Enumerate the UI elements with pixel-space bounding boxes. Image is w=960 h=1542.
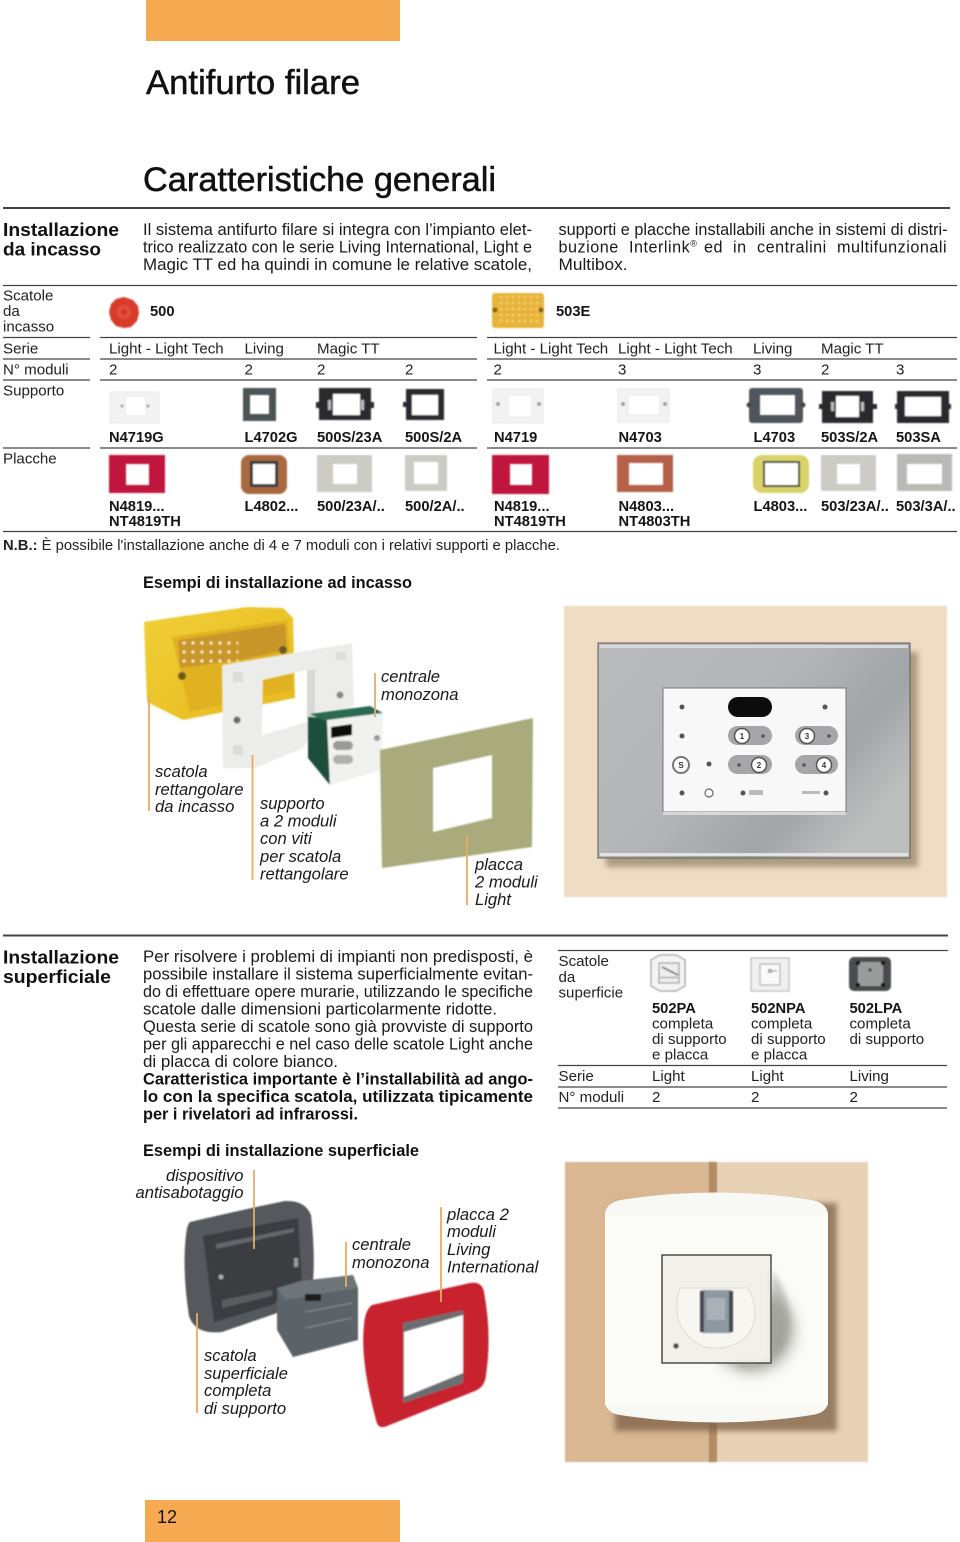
heading: Installazione da incasso (3, 219, 119, 260)
heading: Installazione da incasso: Installazione (3, 219, 119, 240)
table: scatole da incasso (3, 286, 957, 532)
body text surface installation: Caratteristica importante è l’installabilità ad ango- (143, 1070, 533, 1088)
label: placca 2 moduli Living International: Living (447, 1240, 491, 1259)
column: 502NPA: di supporto (751, 1031, 826, 1048)
control unit module (308, 706, 383, 785)
modules row: 3 (618, 362, 626, 378)
intro text left column: Il sistema antifurto filare si integra con l’impianto elet- (143, 221, 532, 239)
body text surface installation: do di effettuare opere murarie, utilizzando le specifiche (143, 983, 533, 1001)
heading: Installazione superficiale (3, 946, 119, 987)
modules row (109, 362, 904, 378)
row labels: Placche (3, 450, 57, 468)
intro text right column: Multibox. (558, 256, 628, 274)
intro text right column: buzione (558, 238, 619, 256)
column: 502NPA (751, 1001, 826, 1106)
modules row: 2 (821, 362, 829, 378)
note N.B.: N.B.: È possibile l'installazione anche di 4 e 7 moduli con i relativi supporti e placche. (3, 537, 560, 554)
column: 502PA: di supporto (652, 1031, 727, 1048)
modules row: 2 (244, 362, 253, 378)
column: 502PA (652, 1001, 727, 1106)
column: 502PA: Light (652, 1068, 686, 1085)
modules row: 3 (753, 362, 761, 378)
column: 502NPA: 502NPA (751, 1001, 806, 1017)
white support frame (222, 643, 354, 768)
series row left: Magic TT (317, 340, 380, 358)
exploded diagram: flush installation (144, 607, 539, 909)
icon: 502NPA box (751, 958, 789, 991)
column: 502NPA: completa (751, 1016, 813, 1032)
label: dispositivo antisabotaggio: dispositivo (166, 1166, 244, 1185)
label: placca 2 moduli Living International: International (447, 1258, 540, 1276)
modules row: 3 (896, 362, 904, 378)
row labels (3, 288, 69, 468)
column: 502NPA: 2 (751, 1089, 759, 1106)
body text surface installation (143, 948, 533, 1124)
supports codes: N4719G (109, 430, 164, 446)
series row left (109, 340, 380, 358)
label: scatola superficiale completa di supporto: scatola (204, 1346, 257, 1365)
series row right (494, 340, 884, 358)
heading: Esempi di installazione superficiale: Esempi di installazione superficiale (143, 1141, 419, 1160)
row labels (558, 953, 624, 1106)
label: supporto a 2 moduli: rettangolare (260, 864, 349, 884)
label: placca 2 moduli Light: 2 moduli (474, 872, 539, 892)
modules row: 2 (109, 362, 117, 378)
cover plates codes: NT4803TH (618, 514, 690, 530)
cover plates row images (109, 454, 952, 494)
row labels: da (3, 303, 20, 320)
label: dispositivo antisabotaggio: antisabotaggio (136, 1183, 244, 1202)
top orange tab (146, 0, 400, 41)
cover plates codes (109, 499, 956, 530)
supports codes: 500S/23A (317, 430, 383, 446)
column: 502PA: 502PA (652, 1001, 696, 1017)
modules row: 2 (494, 362, 502, 378)
body text surface installation: lo con la specifica scatola, utilizzata tipicamente (143, 1088, 533, 1106)
cover plates codes: NT4819TH (494, 514, 566, 530)
heading: Installazione da incasso: da incasso (3, 238, 101, 260)
column: 502LPA: 2 (850, 1089, 858, 1106)
series row right: Light - Light Tech (618, 340, 733, 358)
cover plates codes: 503/23A/.. (821, 499, 889, 515)
series row right: Light - Light Tech (494, 340, 608, 358)
row labels: da (558, 969, 576, 986)
row labels: Serie (558, 1068, 594, 1085)
cover plates codes: N4803... (618, 499, 674, 515)
row labels: N° moduli (3, 362, 69, 378)
cover plates codes: L4803... (754, 499, 807, 515)
intro text right column: centralini (757, 238, 827, 256)
series row right: Living (753, 340, 792, 358)
label: supporto a 2 moduli: a 2 moduli (260, 812, 338, 830)
intro text right column: ® (690, 238, 697, 248)
column: 502LPA: di supporto (850, 1031, 924, 1048)
panel display and buttons: 2 (757, 761, 762, 770)
label: scatola superficiale completa di supporto (197, 1313, 288, 1418)
column: 502PA: completa (652, 1016, 714, 1032)
cover plates codes: 500/2A/.. (405, 499, 465, 515)
label: centrale monozona: monozona (381, 685, 458, 704)
label: supporto a 2 moduli: per scatola (259, 847, 341, 866)
label: dispositivo antisabotaggio (136, 1166, 254, 1249)
cover plates codes: NT4819TH (109, 514, 181, 530)
row labels: Supporto (3, 382, 64, 400)
label: scatola rettangolare da incasso: scatola (155, 762, 208, 781)
label: supporto a 2 moduli: supporto (260, 794, 325, 813)
icon: yellow box 503E (492, 293, 544, 328)
row labels: incasso (3, 318, 54, 336)
olive cover plate (380, 718, 533, 868)
label: centrale monozona (375, 667, 458, 717)
grey control module (277, 1275, 358, 1357)
intro text left column: trico realizzato con le serie Living International, Light e (143, 238, 532, 256)
series row left: Light - Light Tech (109, 340, 224, 358)
label: placca 2 moduli Light: Light (475, 890, 512, 909)
label: supporto a 2 moduli (252, 755, 349, 884)
supports codes: L4702G (244, 430, 298, 446)
label: 503E: 503E (556, 304, 591, 320)
supports codes: 503SA (896, 430, 941, 446)
panel display and buttons (673, 697, 838, 797)
supports codes: L4703 (754, 430, 795, 446)
label: supporto a 2 moduli: con viti (260, 829, 313, 848)
heading: Installazione superficiale: Installazione (3, 946, 119, 968)
body text surface installation: per gli apparecchi e nel caso delle scatole Light anche (143, 1036, 533, 1054)
body text surface installation: per i rivelatori ad infrarossi. (143, 1106, 358, 1124)
cover plates codes: N4819... (109, 499, 165, 515)
column: 502NPA: e placca (751, 1046, 808, 1064)
label: placca 2 moduli Living International: moduli (447, 1222, 497, 1241)
label: scatola rettangolare da incasso: da incasso (155, 797, 234, 816)
label: centrale monozona: centrale (352, 1235, 411, 1254)
column: 502LPA: 502LPA (850, 1001, 903, 1017)
body text surface installation: Questa serie di scatole sono già provviste di supporto (143, 1018, 533, 1036)
row labels: superficie (558, 984, 623, 1002)
intro text left column (143, 221, 532, 274)
label: centrale monozona: centrale (381, 667, 440, 686)
cover plates codes: 500/23A/.. (317, 499, 385, 515)
cover plates codes: 503/3A/.. (896, 499, 956, 515)
column: 502LPA: completa (850, 1016, 911, 1032)
label: placca 2 moduli Light: placca (474, 855, 523, 874)
icon: 502PA box (651, 955, 685, 991)
intro text right column: Interlink (629, 238, 691, 256)
label: scatola superficiale completa di supporto: completa (204, 1381, 271, 1400)
row labels: N° moduli (558, 1089, 624, 1106)
heading: Esempi di installazione ad incasso: Esempi di installazione ad incasso (143, 573, 412, 592)
intro text right column: ed (704, 238, 723, 256)
row labels: Scatole (558, 953, 609, 970)
label: centrale monozona (346, 1235, 430, 1287)
intro text right column (558, 221, 948, 274)
intro text right column: in (733, 238, 747, 256)
page title: Antifurto filare (146, 64, 360, 102)
supports row images (110, 388, 951, 423)
column: 502PA: 2 (652, 1089, 660, 1106)
supports codes (109, 430, 941, 446)
row labels: Serie (3, 340, 38, 358)
label: centrale monozona: monozona (352, 1253, 430, 1272)
intro text left column: Magic TT ed ha quindi in comune le relative scatole, (143, 256, 532, 274)
panel display and buttons: 4 (822, 761, 827, 770)
cover plates codes: L4802... (244, 499, 298, 515)
column: 502LPA (850, 1001, 924, 1106)
column: 502LPA: Living (850, 1068, 889, 1085)
cover plates codes: N4819... (494, 499, 550, 515)
label: scatola superficiale completa di supporto: di supporto (204, 1399, 286, 1418)
column: 502PA: e placca (652, 1046, 709, 1064)
label: placca 2 moduli Living International (441, 1205, 540, 1302)
detector lens (674, 1290, 733, 1348)
panel display and buttons: 1 (740, 732, 745, 741)
panel display and buttons: S (678, 761, 684, 770)
photo: surface-mounted infrared detector (565, 1162, 868, 1462)
series row left: Living (244, 340, 284, 358)
section heading: Caratteristiche generali: Caratteristiche generali (143, 161, 496, 199)
red cover plate (363, 1283, 489, 1427)
intro text right column: supporti e placche installabili anche in sistemi di distri- (558, 221, 948, 239)
exploded diagram: surface installation (136, 1166, 540, 1427)
label: scatola rettangolare da incasso: rettangolare (155, 780, 244, 799)
label: scatola superficiale completa di supporto: superficiale (204, 1364, 288, 1383)
table: scatole da superficie (558, 950, 948, 1108)
body text surface installation: scatole dalle dimensioni particolarmente ridotte. (143, 1000, 497, 1018)
label: scatola rettangolare da incasso (149, 695, 244, 816)
supports codes: 503S/2A (821, 430, 879, 446)
row labels: Scatole (3, 288, 53, 304)
modules row: 2 (317, 362, 325, 378)
bottom orange tab (145, 1500, 400, 1542)
series row right: Magic TT (821, 340, 884, 358)
photo: flush-mounted alarm panel (564, 606, 947, 897)
page number: 12 (157, 1507, 177, 1527)
intro text right column: multifunzionali (837, 238, 947, 256)
body text surface installation: possibile installare il sistema superficialmente evitan- (143, 966, 533, 984)
body text surface installation: Per risolvere i problemi di impianti non predisposti, è (143, 948, 533, 966)
label: placca 2 moduli Light (467, 835, 539, 909)
panel display and buttons: 3 (805, 732, 810, 741)
supports codes: N4703 (618, 430, 662, 446)
supports codes: 500S/2A (405, 430, 463, 446)
icon: 502LPA box (849, 957, 891, 991)
yellow rectangular box (144, 607, 295, 720)
label: placca 2 moduli Living International: placca 2 (446, 1205, 509, 1224)
supports codes: N4719 (494, 430, 537, 446)
icon: round red box 500 (109, 297, 139, 328)
column: 502NPA: Light (751, 1068, 785, 1085)
heading: Installazione superficiale: superficiale (3, 966, 111, 987)
body text surface installation: di placca di colore bianco. (143, 1053, 338, 1071)
label: 500: 500 (150, 304, 175, 320)
dark surface box (185, 1201, 314, 1332)
modules row: 2 (405, 362, 413, 378)
